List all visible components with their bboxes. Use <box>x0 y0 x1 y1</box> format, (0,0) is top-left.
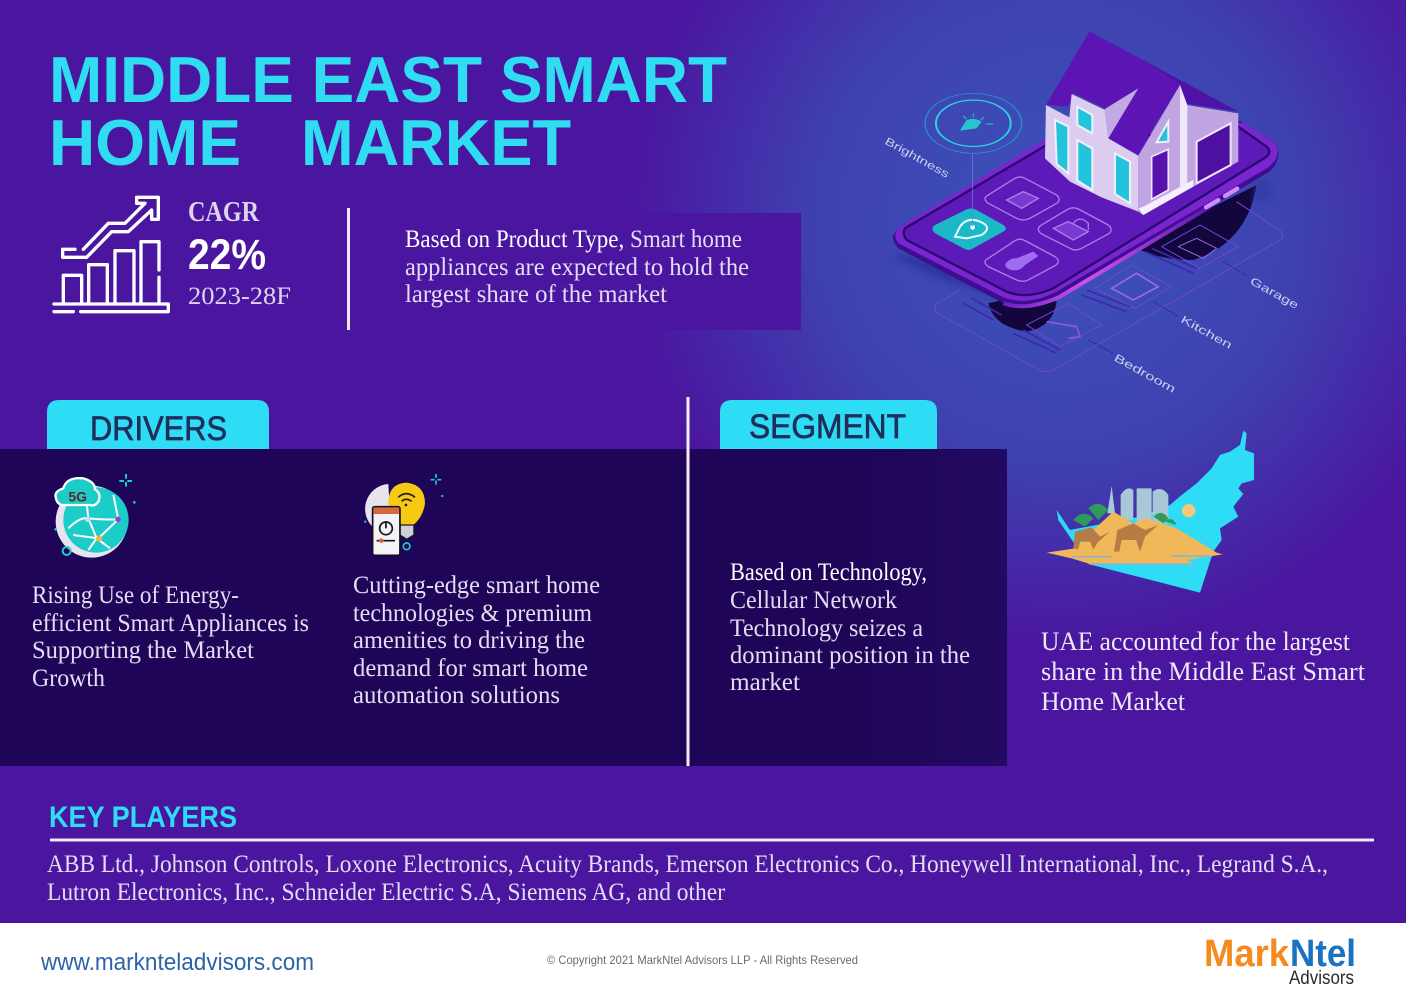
phone shadows <box>892 177 1273 332</box>
text: key players list: Lutron Electronics, Inc., Schneider Electric S.A, Siemens AG, and other <box>47 879 726 906</box>
illustration labels <box>883 135 1300 396</box>
text: segment technology: Based on Technology, <box>730 559 927 586</box>
icon: growth chart <box>54 197 168 312</box>
CAGR period: 2023-28F <box>188 283 291 310</box>
dune stripes <box>1072 556 1210 564</box>
text: key players list <box>47 851 1328 906</box>
text: energy-efficient appliances: efficient Smart Appliances is <box>32 610 309 637</box>
callout band <box>372 213 801 330</box>
roof <box>1143 60 1238 112</box>
illustration labels: Bedroom <box>1112 352 1177 396</box>
divider <box>50 838 1374 842</box>
phone buttons <box>1206 189 1237 207</box>
text: cutting-edge technologies: automation solutions <box>353 682 560 709</box>
CAGR value: 22% <box>188 231 266 279</box>
title: MARKET <box>301 106 571 179</box>
illustration labels: Kitchen <box>1179 314 1234 352</box>
text: energy-efficient appliances <box>32 582 309 692</box>
illustration labels: Brightness <box>883 135 952 181</box>
callout text: appliances are expected to hold the <box>405 254 749 281</box>
logo: Mark <box>1204 933 1290 975</box>
text: segment technology: dominant position in the <box>730 642 970 669</box>
text: energy-efficient appliances: Rising Use of Energy- <box>32 582 239 609</box>
brightness tile <box>932 153 1006 250</box>
heading: segment: SEGMENT <box>749 408 906 446</box>
background glow <box>620 0 1406 720</box>
phone bezel <box>904 127 1269 295</box>
dune <box>1047 512 1223 564</box>
CAGR block <box>188 196 291 310</box>
brightness badge <box>925 93 1022 153</box>
title <box>49 43 727 179</box>
icon: 5G globe <box>54 474 136 558</box>
palms <box>1073 504 1177 527</box>
text: segment technology: Technology seizes a <box>730 615 923 642</box>
icon: UAE map <box>1047 431 1254 593</box>
sun <box>1182 504 1195 517</box>
text: UAE share: share in the Middle East Smart <box>1041 657 1366 686</box>
text: energy-efficient appliances: Supporting the Market <box>32 637 254 664</box>
floor plan <box>935 202 1282 372</box>
map shape <box>1057 431 1254 593</box>
panel: drivers and segment <box>0 449 1007 766</box>
CAGR label: CAGR <box>188 196 260 228</box>
thermometer <box>1005 252 1038 270</box>
website: www.marknteladvisors.com <box>40 949 314 976</box>
phone body <box>893 121 1278 307</box>
text: segment technology <box>730 559 970 696</box>
garage door <box>1197 123 1231 183</box>
callout text <box>405 226 749 308</box>
callout text: largest share of the market <box>405 281 667 308</box>
footer <box>0 923 1406 996</box>
app tiles <box>985 177 1111 281</box>
text: cutting-edge technologies: technologies & premium <box>353 600 593 627</box>
text: cutting-edge technologies: demand for smart home <box>353 655 588 682</box>
phone edge highlight <box>1003 207 1210 306</box>
heading: segment <box>720 400 937 449</box>
footer band <box>0 923 1406 996</box>
heading: drivers: DRIVERS <box>90 410 227 448</box>
title: MIDDLE EAST SMART <box>49 43 727 116</box>
text: cutting-edge technologies: Cutting-edge smart home <box>353 572 600 599</box>
logo: Ntel <box>1290 933 1356 975</box>
text: segment technology: Cellular Network <box>730 587 897 614</box>
house <box>1045 32 1238 215</box>
illustration labels: Garage <box>1248 275 1300 312</box>
callout text: Based on Product Type, Smart home <box>405 226 742 253</box>
heading: key players: KEY PLAYERS <box>49 801 237 834</box>
camels <box>1073 523 1158 552</box>
text: segment technology: market <box>730 669 800 696</box>
text: UAE share: UAE accounted for the largest <box>1041 627 1351 656</box>
skyline <box>1107 486 1168 523</box>
text: cutting-edge technologies: amenities to driving the <box>353 627 585 654</box>
text: energy-efficient appliances: Growth <box>32 665 105 692</box>
windows <box>1055 107 1168 203</box>
text: key players list: ABB Ltd., Johnson Controls, Loxone Electronics, Acuity Brands, Emerson Electronics Co., Honeywell International, Inc., Legrand S.A., <box>47 851 1328 878</box>
divider <box>686 397 690 766</box>
copyright: © Copyright 2021 MarkNtel Advisors LLP - All Rights Reserved <box>547 953 858 967</box>
divider <box>347 208 350 330</box>
icon: 5G globe: 5G <box>68 489 87 505</box>
logo <box>1204 933 1356 989</box>
product type callout <box>372 213 801 330</box>
heading: drivers <box>47 400 269 449</box>
title: HOME <box>49 106 241 179</box>
icon: smart bulb and phone <box>364 474 443 555</box>
side door <box>1152 149 1168 199</box>
illustration: smart home on phone <box>883 32 1300 396</box>
text: UAE share <box>1041 627 1366 716</box>
logo: Advisors <box>1289 968 1354 989</box>
text: UAE share: Home Market <box>1041 687 1186 716</box>
text: cutting-edge technologies <box>353 572 600 709</box>
walls <box>1045 94 1138 212</box>
